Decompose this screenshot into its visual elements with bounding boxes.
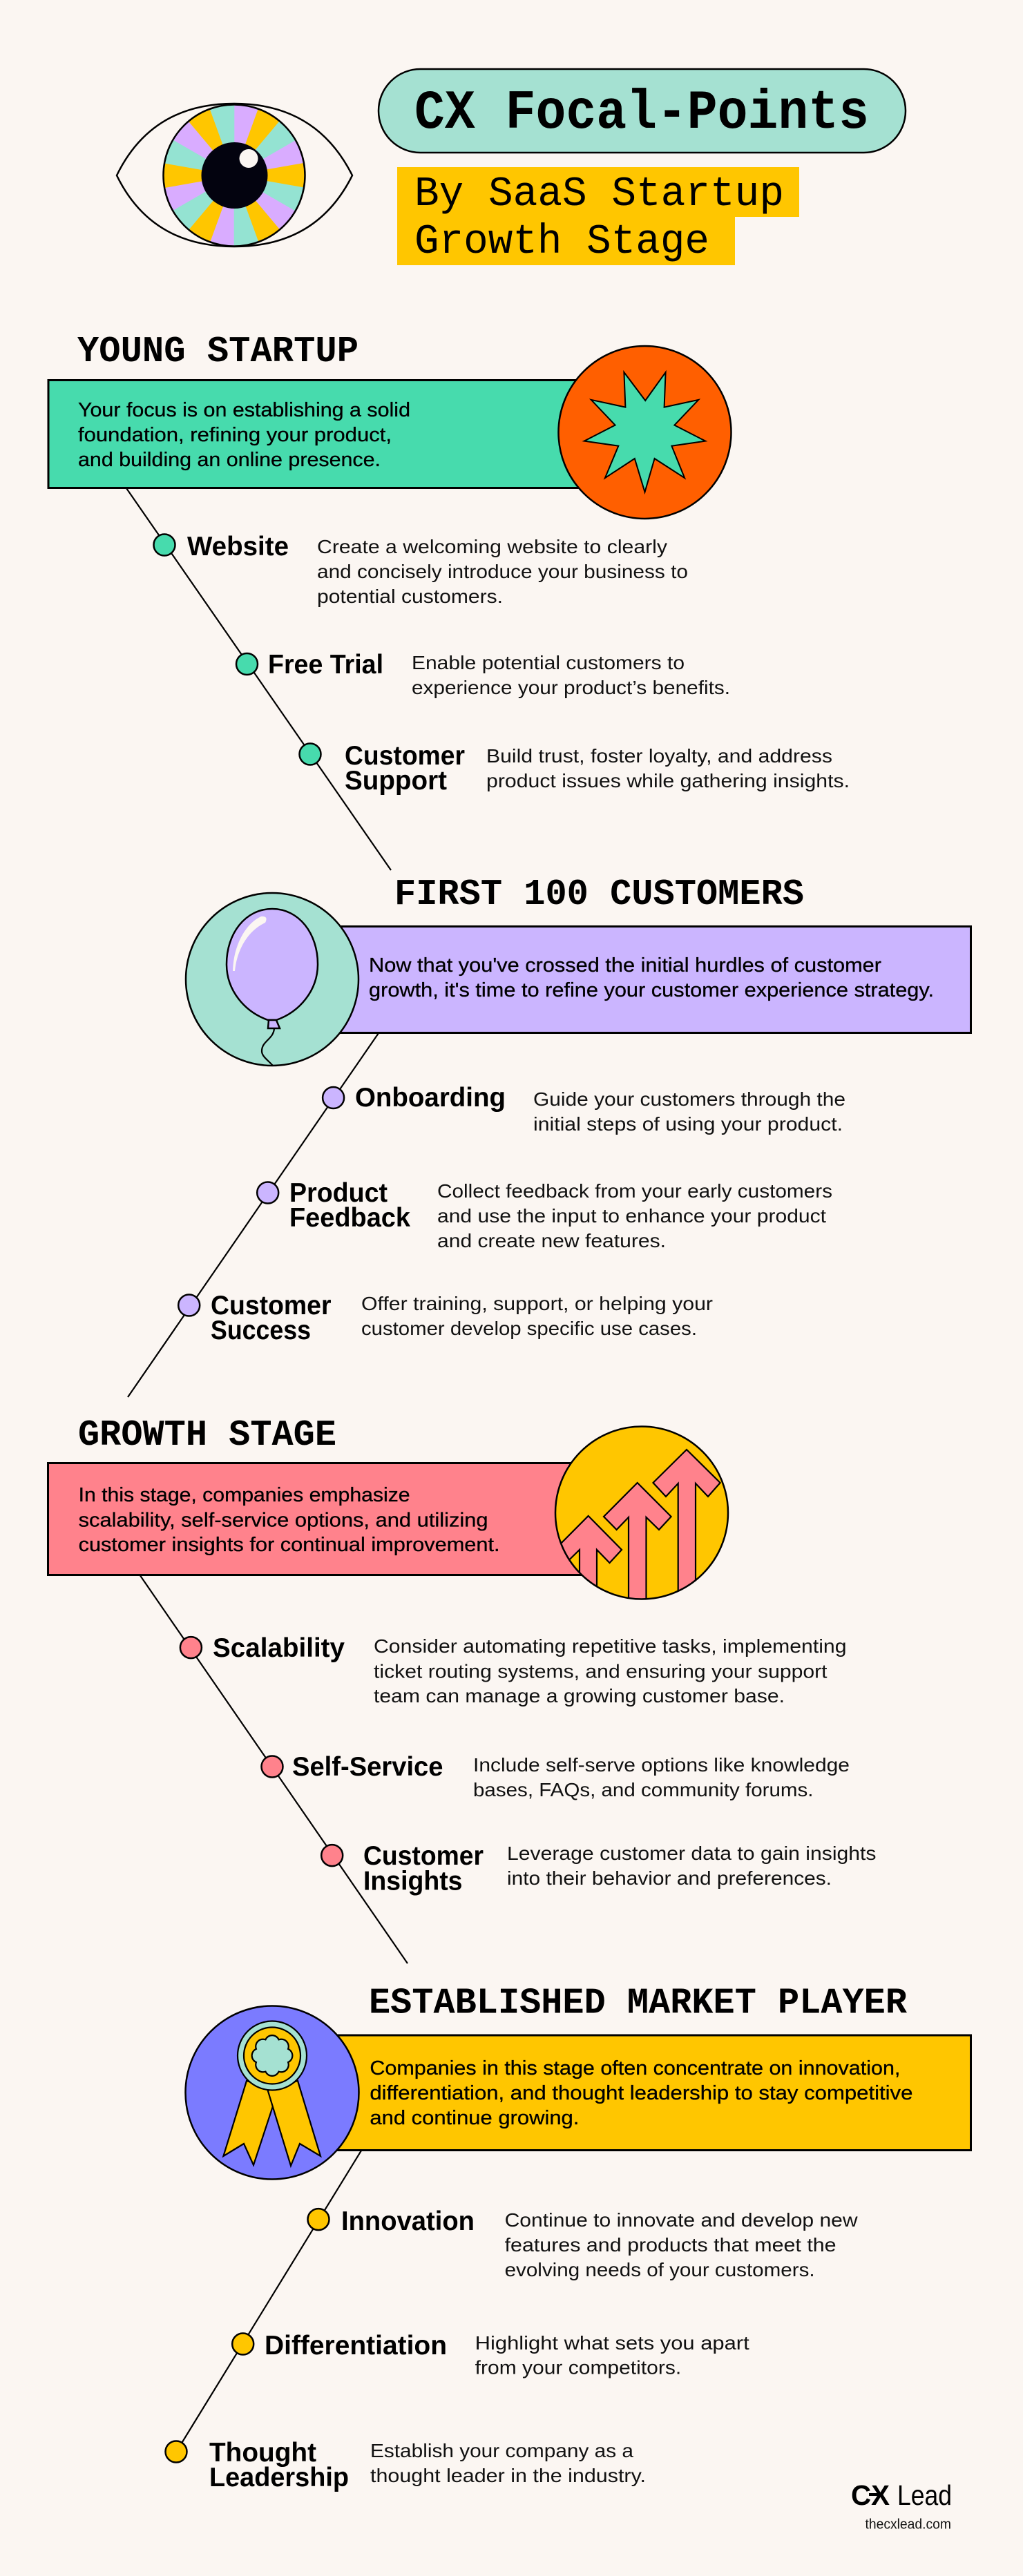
- item: onboarding: initial steps of using your product.: [533, 1113, 843, 1135]
- item: customer insights: into their behavior and preferences.: [507, 1867, 832, 1889]
- panel: growth stage intro: [48, 1463, 587, 1575]
- item: customer insights: [321, 1841, 876, 1896]
- logo: CX Lead: [851, 2479, 952, 2532]
- item: thought leadership: Leadership: [209, 2463, 349, 2492]
- item: thought leadership: thought leader in the industry.: [370, 2465, 646, 2486]
- item: product feedback: [257, 1178, 832, 1251]
- item: customer success: Success: [211, 1316, 311, 1345]
- item: self-service: [261, 1752, 850, 1800]
- item: thought leadership: [166, 2438, 646, 2492]
- item: customer success: customer develop specific use cases.: [361, 1318, 697, 1339]
- item: customer insights: Insights: [363, 1866, 463, 1896]
- title: [379, 69, 906, 153]
- item: self-service: Include self-serve options like knowledge: [473, 1754, 850, 1776]
- subtitle: By SaaS Startup: [414, 171, 784, 218]
- logo: CX Lead: thecxlead.com: [865, 2517, 951, 2532]
- heading: FIRST 100 CUSTOMERS: [394, 874, 804, 915]
- item: free trial: [236, 650, 730, 698]
- item: scalability: Scalability: [213, 1633, 345, 1663]
- item: differentiation: Differentiation: [265, 2331, 447, 2361]
- item: product feedback: Collect feedback from your early customers: [437, 1180, 832, 1202]
- panel: young startup intro: Your focus is on establishing a solid: [78, 399, 410, 421]
- panel: young startup intro: [48, 380, 587, 488]
- item: free trial: Free Trial: [268, 650, 383, 680]
- panel: growth stage intro: scalability, self-service options, and utilizing: [79, 1510, 488, 1532]
- icon: award ribbon: [185, 2006, 359, 2180]
- subtitle: Growth Stage: [414, 219, 709, 266]
- section: first 100 customers: [128, 874, 971, 1397]
- item: innovation: Innovation: [341, 2207, 475, 2236]
- section: young startup: [48, 331, 850, 870]
- item: innovation: features and products that meet the: [505, 2234, 836, 2256]
- item: innovation: [308, 2207, 858, 2280]
- panel: established market player intro: and continue growing.: [370, 2107, 579, 2129]
- heading: YOUNG STARTUP: [77, 331, 358, 372]
- item: self-service: Self-Service: [292, 1752, 443, 1782]
- icon: growth arrows: [555, 1427, 728, 1616]
- item: innovation: evolving needs of your customers.: [505, 2259, 815, 2280]
- item: differentiation: from your competitors.: [475, 2356, 681, 2378]
- panel: growth stage intro: customer insights for continual improvement.: [79, 1534, 500, 1556]
- item: scalability: team can manage a growing customer base.: [374, 1685, 785, 1707]
- item: customer support: product issues while gathering insights.: [486, 770, 850, 791]
- panel: young startup intro: foundation, refining your product,: [78, 424, 392, 446]
- item: product feedback: Feedback: [289, 1203, 411, 1233]
- item: customer insights: Customer: [363, 1841, 484, 1871]
- item: innovation: Continue to innovate and develop new: [505, 2209, 858, 2231]
- item: website: and concisely introduce your business to: [317, 561, 688, 582]
- item: product feedback: and create new features.: [437, 1230, 666, 1251]
- connector line: [182, 2151, 361, 2443]
- item: website: Website: [187, 532, 289, 561]
- logo: CX Lead: Lead: [897, 2479, 952, 2511]
- item: product feedback: and use the input to enhance your product: [437, 1205, 826, 1227]
- item: free trial: experience your product’s benefits.: [412, 677, 730, 698]
- item: customer support: Support: [345, 766, 447, 796]
- panel: growth stage intro: In this stage, companies emphasize: [79, 1484, 410, 1506]
- panel: established market player intro: [304, 2035, 971, 2151]
- panel: established market player intro: differentiation, and thought leadership to stay competitive: [370, 2082, 912, 2104]
- item: differentiation: Highlight what sets you apart: [475, 2332, 749, 2354]
- panel: established market player intro: Companies in this stage often concentrate on innovation,: [370, 2057, 900, 2079]
- icon: eye: [117, 99, 352, 251]
- panel: first 100 customers intro: growth, it's time to refine your customer experience strategy.: [369, 979, 934, 1001]
- icon: balloon: [186, 893, 358, 1066]
- icon: starburst: [558, 346, 731, 519]
- heading: ESTABLISHED MARKET PLAYER: [369, 1982, 907, 2024]
- item: self-service: bases, FAQs, and community forums.: [473, 1779, 814, 1800]
- item: thought leadership: Establish your company as a: [370, 2440, 634, 2461]
- item: onboarding: [323, 1083, 845, 1135]
- item: scalability: Consider automating repetitive tasks, implementing: [374, 1635, 847, 1657]
- item: website: potential customers.: [317, 586, 503, 607]
- item: website: Create a welcoming website to clearly: [317, 536, 667, 557]
- connector line: [126, 488, 391, 870]
- item: free trial: Enable potential customers to: [412, 652, 685, 673]
- connector line: [140, 1575, 408, 1963]
- item: customer insights: Leverage customer data to gain insights: [507, 1843, 876, 1864]
- item: scalability: [180, 1633, 846, 1707]
- item: scalability: ticket routing systems, and ensuring your support: [374, 1660, 828, 1682]
- title: CX Focal-Points: [414, 82, 869, 145]
- item: customer success: Offer training, support, or helping your: [361, 1293, 713, 1314]
- item: customer support: Build trust, foster loyalty, and address: [486, 745, 832, 767]
- item: customer success: Customer: [211, 1291, 332, 1320]
- item: website: [153, 532, 688, 607]
- heading: GROWTH STAGE: [78, 1414, 336, 1456]
- item: product feedback: Product: [289, 1178, 388, 1208]
- item: customer success: [178, 1291, 713, 1345]
- panel: first 100 customers intro: [304, 927, 971, 1033]
- subtitle: [397, 167, 799, 266]
- item: customer support: [300, 741, 850, 796]
- panel: first 100 customers intro: Now that you've crossed the initial hurdles of customer: [369, 954, 882, 977]
- logo: CX Lead: CX: [851, 2479, 890, 2511]
- item: customer support: Customer: [345, 741, 465, 771]
- item: thought leadership: Thought: [209, 2438, 316, 2468]
- item: onboarding: Guide your customers through the: [533, 1088, 845, 1110]
- item: differentiation: [232, 2331, 749, 2378]
- connector line: [128, 1033, 379, 1397]
- panel: young startup intro: and building an online presence.: [78, 449, 381, 471]
- section: growth stage: [48, 1414, 876, 1963]
- section: established market player: [166, 1982, 971, 2492]
- item: onboarding: Onboarding: [355, 1083, 506, 1113]
